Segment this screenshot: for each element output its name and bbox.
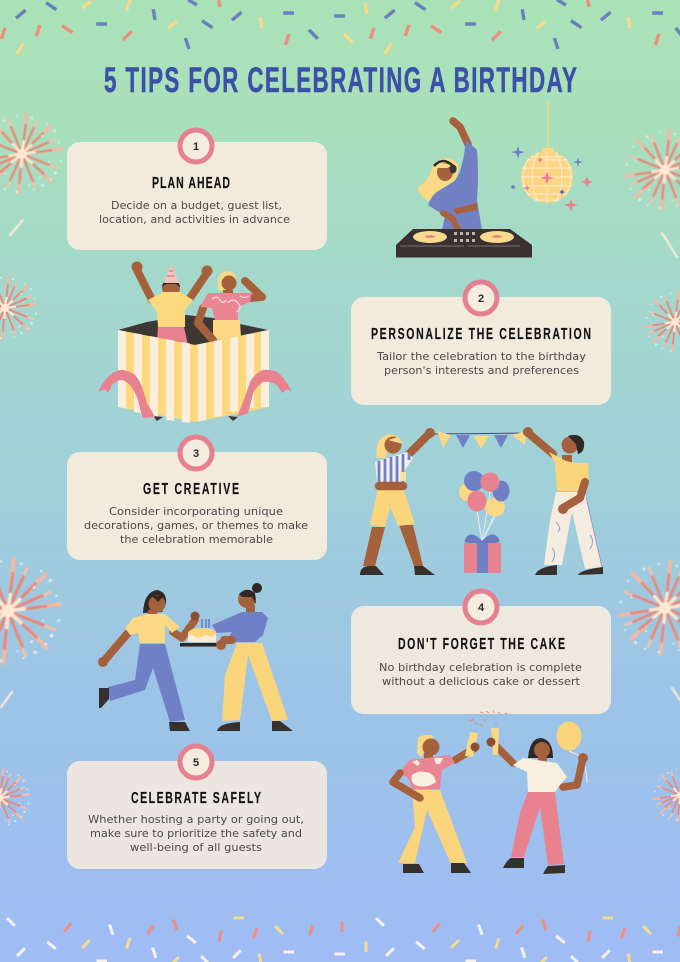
text: plan ahead body <box>99 200 290 226</box>
heading: cake: DON'T FORGET THE CAKE <box>398 635 565 653</box>
illustration: two women toasting with poppers <box>393 710 588 874</box>
firework: left third <box>0 559 60 663</box>
bunting <box>432 431 528 449</box>
firework: right top <box>625 130 680 210</box>
woman in floral shirt <box>393 732 480 873</box>
text: cake body <box>379 662 582 688</box>
firework: right third <box>619 562 680 654</box>
heading: get creative: GET CREATIVE <box>143 480 239 498</box>
top confetti <box>1 0 680 55</box>
text: plan ahead body: location, and activities in advance <box>99 214 290 226</box>
woman in yellow pants <box>212 583 293 731</box>
panel: tip 5 safely <box>67 746 327 869</box>
illustration: people in gift box <box>118 262 269 423</box>
illustration: disco ball and sparkles <box>511 100 593 212</box>
firework: left fourth <box>0 769 29 827</box>
panel: tip 4 cake <box>351 591 611 714</box>
icon: left ribbon <box>98 370 155 418</box>
badge 1: 1 <box>193 141 199 153</box>
firework streaks <box>1 220 680 707</box>
woman with party horn <box>198 271 262 340</box>
text: get creative body: decorations, games, or themes to make <box>84 520 308 532</box>
text: personalize body: Tailor the celebration to the birthday <box>376 351 586 363</box>
badge 5: 5 <box>193 757 199 769</box>
badge 2: 2 <box>478 293 484 305</box>
popper confetti <box>469 710 507 726</box>
heading: personalize: PERSONALIZE THE CELEBRATION <box>371 325 591 343</box>
badge 3: 3 <box>193 448 199 460</box>
illustration: friends with bunting and gift <box>360 427 603 575</box>
illustration: DJ at decks <box>396 121 532 258</box>
text: cake body: No birthday celebration is complete <box>379 662 582 674</box>
firework: right fourth <box>654 769 680 821</box>
badge 4 <box>465 591 497 623</box>
text: personalize body <box>376 351 586 377</box>
illustration: two women with cake <box>98 583 293 731</box>
text: safely body: Whether hosting a party or going out, <box>88 814 304 826</box>
woman in blue jeans <box>98 590 200 731</box>
firework: left second <box>0 276 37 340</box>
text: safely body: make sure to prioritize the safety and <box>90 828 302 840</box>
woman in striped shirt <box>360 428 435 575</box>
balloons and gift <box>459 471 510 573</box>
panel: tip 1 plan ahead <box>67 130 327 250</box>
text: get creative body: Consider incorporating unique <box>109 506 283 518</box>
text: get creative body <box>84 506 308 546</box>
bottom confetti <box>6 917 680 962</box>
badge 3 <box>180 437 212 469</box>
text: get creative body: the celebration memorable <box>120 534 273 546</box>
icon: right ribbon <box>237 370 292 417</box>
badge 2 <box>465 282 497 314</box>
gift box front <box>118 330 269 422</box>
panel: tip 3 get creative <box>67 437 327 560</box>
title: 5 TIPS FOR CELEBRATING A BIRTHDAY <box>104 61 577 100</box>
text: safely body: well-being of all guests <box>130 842 262 854</box>
firework: left top <box>0 114 62 194</box>
text: plan ahead body: Decide on a budget, guest list, <box>111 200 282 212</box>
badge 5 <box>180 746 212 778</box>
heading: safely: CELEBRATE SAFELY <box>131 789 261 807</box>
text: safely body <box>88 814 304 854</box>
firework: right second <box>645 292 680 352</box>
man with party hat <box>132 262 212 345</box>
cake on plate <box>180 619 217 646</box>
text: cake body: without a delicious cake or dessert <box>382 676 580 688</box>
text: personalize body: person's interests and preferences <box>384 365 579 377</box>
woman with balloon <box>486 722 588 874</box>
panel: tip 2 personalize <box>351 282 611 405</box>
badge 4: 4 <box>478 602 485 614</box>
man in cream pants <box>523 427 603 575</box>
badge 1 <box>180 130 212 162</box>
heading: plan ahead: PLAN AHEAD <box>152 174 230 192</box>
